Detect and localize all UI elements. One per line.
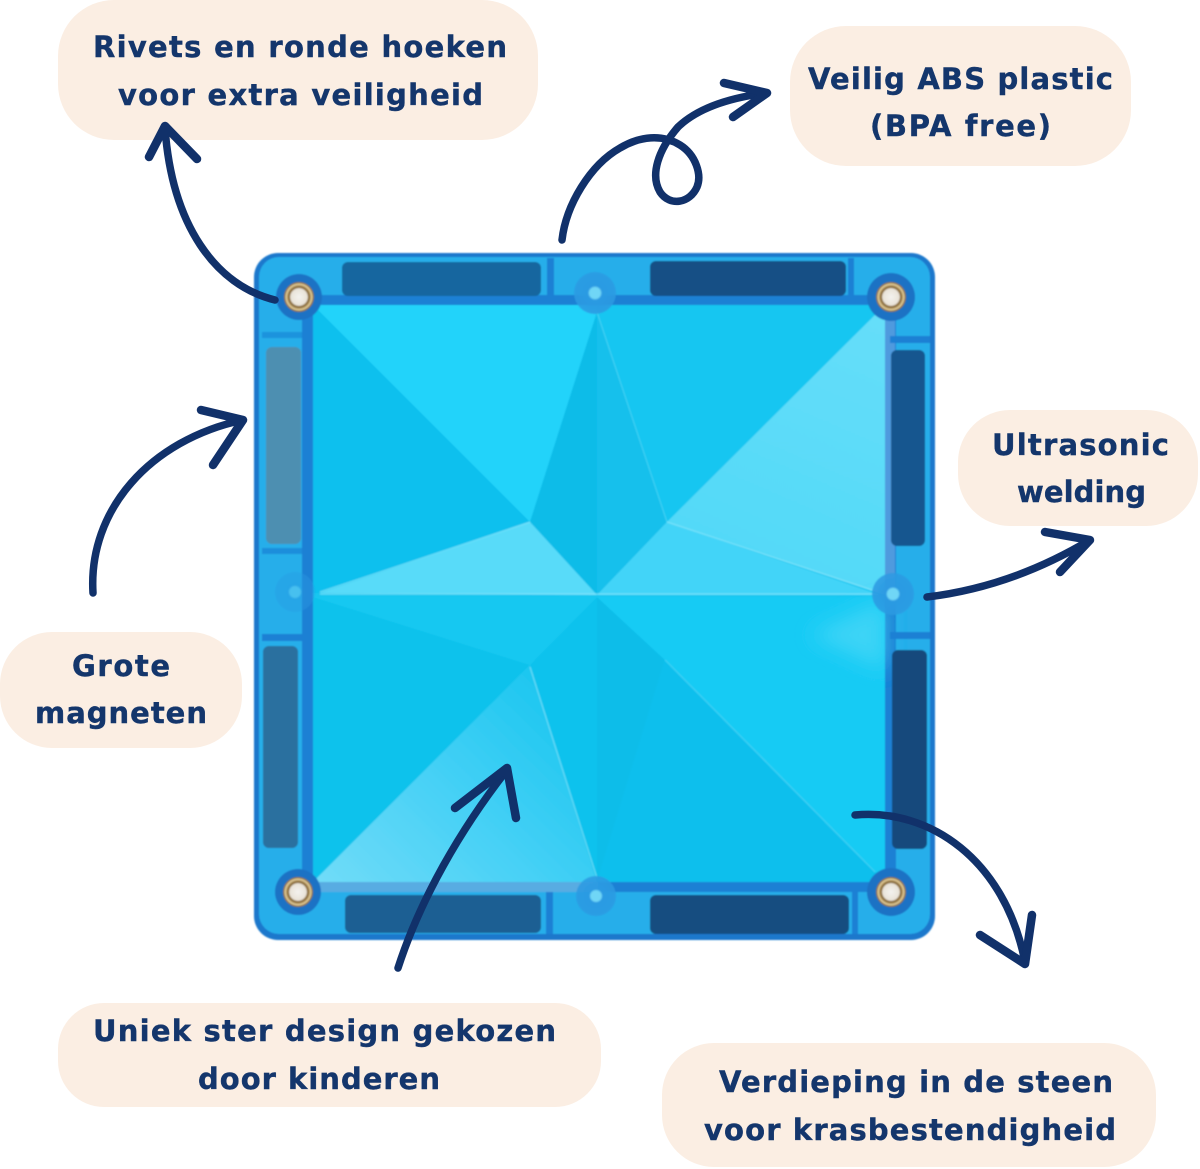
soft sheen, right edge <box>810 600 885 670</box>
inner frame border <box>302 295 896 892</box>
callout: magnets: magneten <box>35 696 207 730</box>
callout: ultrasonic welding: welding <box>1017 475 1146 509</box>
dividers and connector bosses <box>262 258 930 934</box>
callout: ABS plastic: (BPA free) <box>870 109 1051 143</box>
callout: star design: Uniek ster design gekozen <box>93 1014 556 1048</box>
arrow: magnets <box>93 410 243 593</box>
callout: ABS plastic <box>790 26 1131 166</box>
callout: scratch resistance: voor krasbestendigheid <box>704 1113 1116 1147</box>
arrow: rivets <box>149 126 275 300</box>
facet highlights <box>320 522 872 878</box>
callout: rivets <box>58 0 538 140</box>
callout: rivets: voor extra veiligheid <box>118 78 483 112</box>
arrow: ABS plastic <box>562 83 767 240</box>
arrow: ultrasonic welding <box>927 532 1090 597</box>
callout: ultrasonic welding <box>958 410 1198 526</box>
callout: scratch resistance <box>662 1043 1156 1167</box>
tile frame <box>254 253 935 940</box>
callout: scratch resistance: Verdieping in de steen <box>719 1065 1113 1099</box>
tile <box>254 253 935 940</box>
star facets <box>313 305 885 882</box>
arrow: star design <box>398 768 516 968</box>
arrow: scratch resistance <box>855 814 1032 964</box>
callout: ABS plastic: Veilig ABS plastic <box>808 62 1113 96</box>
callout: ultrasonic welding: Ultrasonic <box>992 428 1169 462</box>
callout: rivets: Rivets en ronde hoeken <box>93 30 507 64</box>
callout: star design <box>58 1003 601 1107</box>
rivets <box>275 273 915 916</box>
callout: star design: door kinderen <box>198 1062 440 1096</box>
callout: magnets <box>0 632 242 748</box>
callout: magnets: Grote <box>72 649 170 683</box>
magnets <box>263 261 927 934</box>
